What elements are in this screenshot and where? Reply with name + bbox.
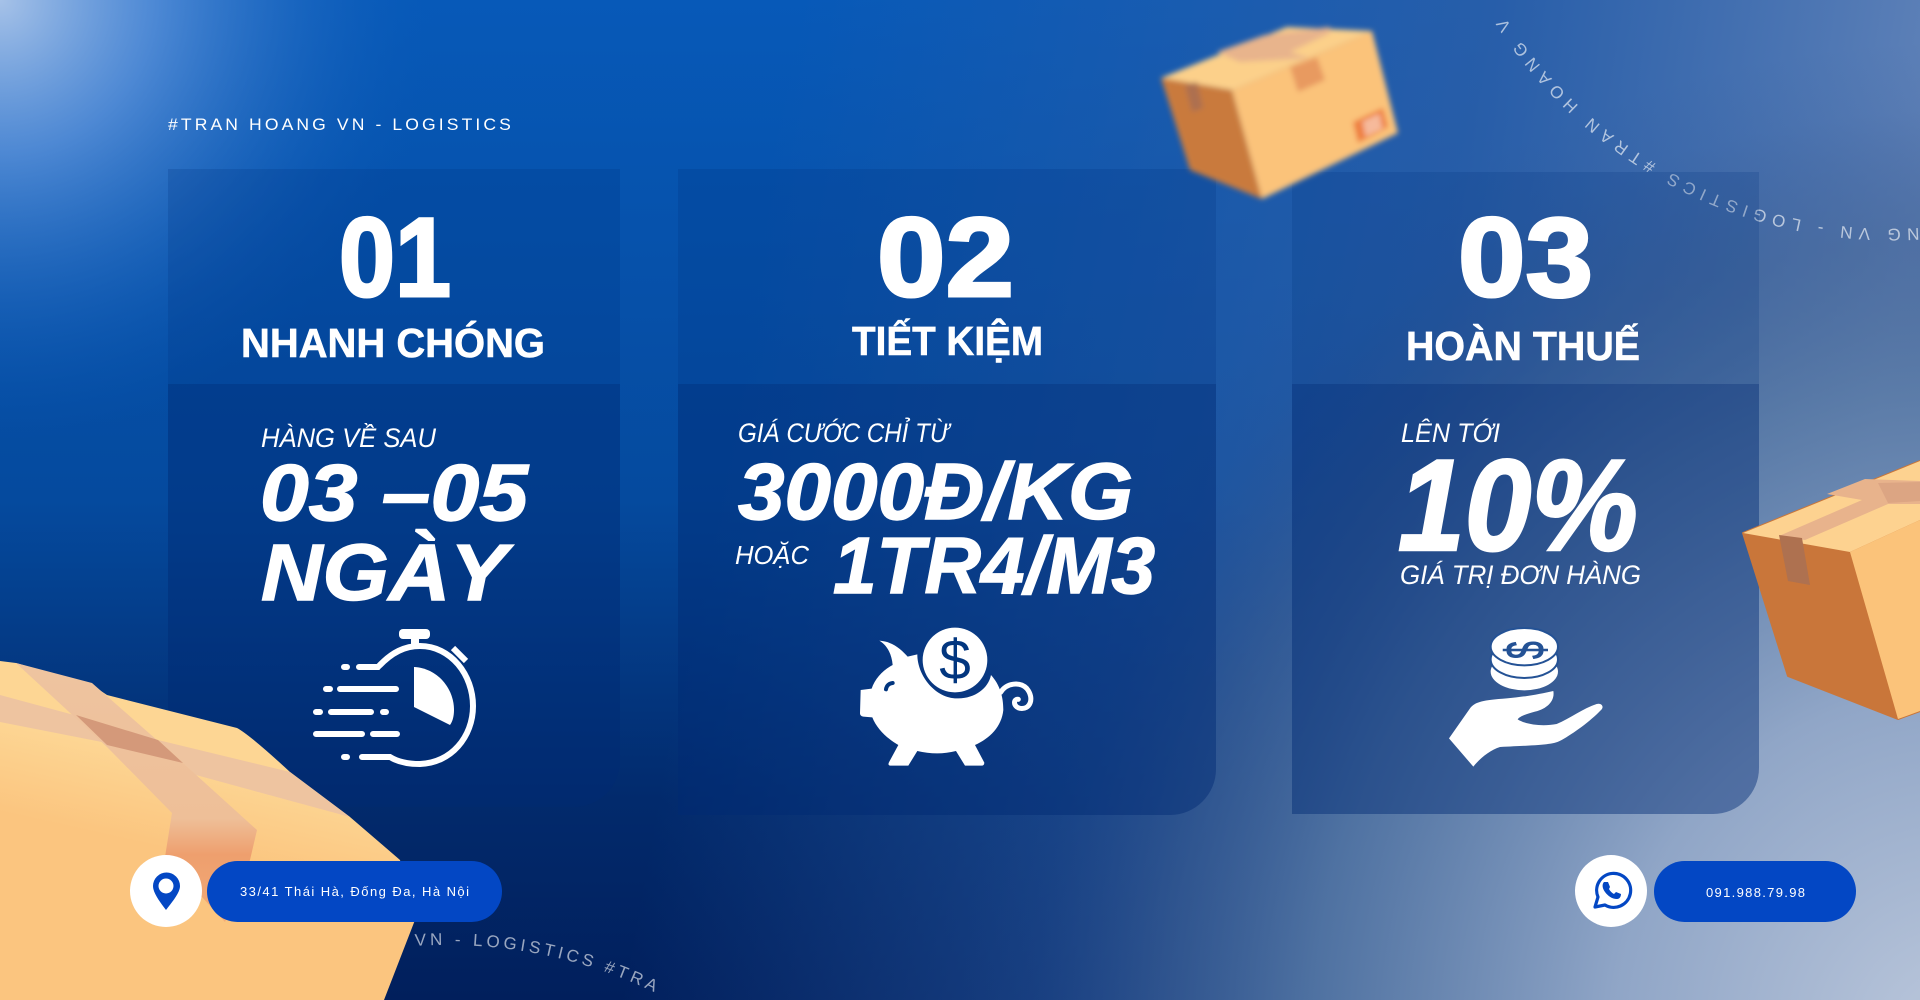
address pill: 33/41 Thái Hà, Đống Đa, Hà Nội [240,884,470,899]
panel 1 number: 01 [339,195,451,320]
address pill [207,861,502,922]
icon: hand with coins [1449,628,1603,767]
curved text: top right: NG VN - LOGISTICS #TRAN HOANG V [1496,22,1918,241]
panel 1: nhanh chóng [168,169,620,807]
phone: whatsapp icon and pill [1575,855,1856,927]
panel 3 caption: GIÁ TRỊ ĐƠN HÀNG [1400,560,1641,590]
panel 1 intro: HÀNG VỀ SAU [261,422,436,453]
icon: piggy bank [860,628,1031,766]
panel 3 heading: HOÀN THUẾ [1406,323,1640,369]
phone pill [1654,861,1856,922]
panel 1 unit: NGÀY [261,528,514,617]
panel 1 heading: NHANH CHÓNG [241,320,545,366]
panel 2 intro: GIÁ CƯỚC CHỈ TỪ [738,416,952,448]
icon: whatsapp [1575,855,1647,927]
box: right parcel [1743,461,1920,719]
panel 2 number: 02 [877,195,1014,320]
box: top blurred parcel [1161,27,1398,199]
icon: location pin [130,855,202,927]
icon: stopwatch [316,629,473,764]
curved text: bottom left: VN - LOGISTICS #TRA [414,933,655,992]
panel 3 intro: LÊN TỚI [1401,417,1500,448]
icon: piggy bank: $ [939,629,971,692]
panel 3: hoàn thuế [1292,172,1759,814]
icon: hand with coins: $ [1494,641,1556,659]
panel 2: tiết kiệm [678,169,1216,815]
panel 2 heading: TIẾT KIỆM [852,318,1043,364]
phone pill: 091.988.79.98 [1706,885,1805,900]
box: bottom left large parcel [0,661,415,1000]
panel 1 value: 03 –05 [260,448,530,537]
panel 3 value: 10% [1398,432,1638,578]
panel 2 price per m3: 1TR4/M3 [833,521,1155,610]
panel 3 number: 03 [1458,195,1593,320]
brand tag line: #TRAN HOANG VN - LOGISTICS [168,115,514,134]
panel 2 price per kg: 3000Đ/KG [738,447,1133,536]
address: location icon and pill [130,855,502,927]
panel 2 or label: HOẶC [735,540,809,570]
